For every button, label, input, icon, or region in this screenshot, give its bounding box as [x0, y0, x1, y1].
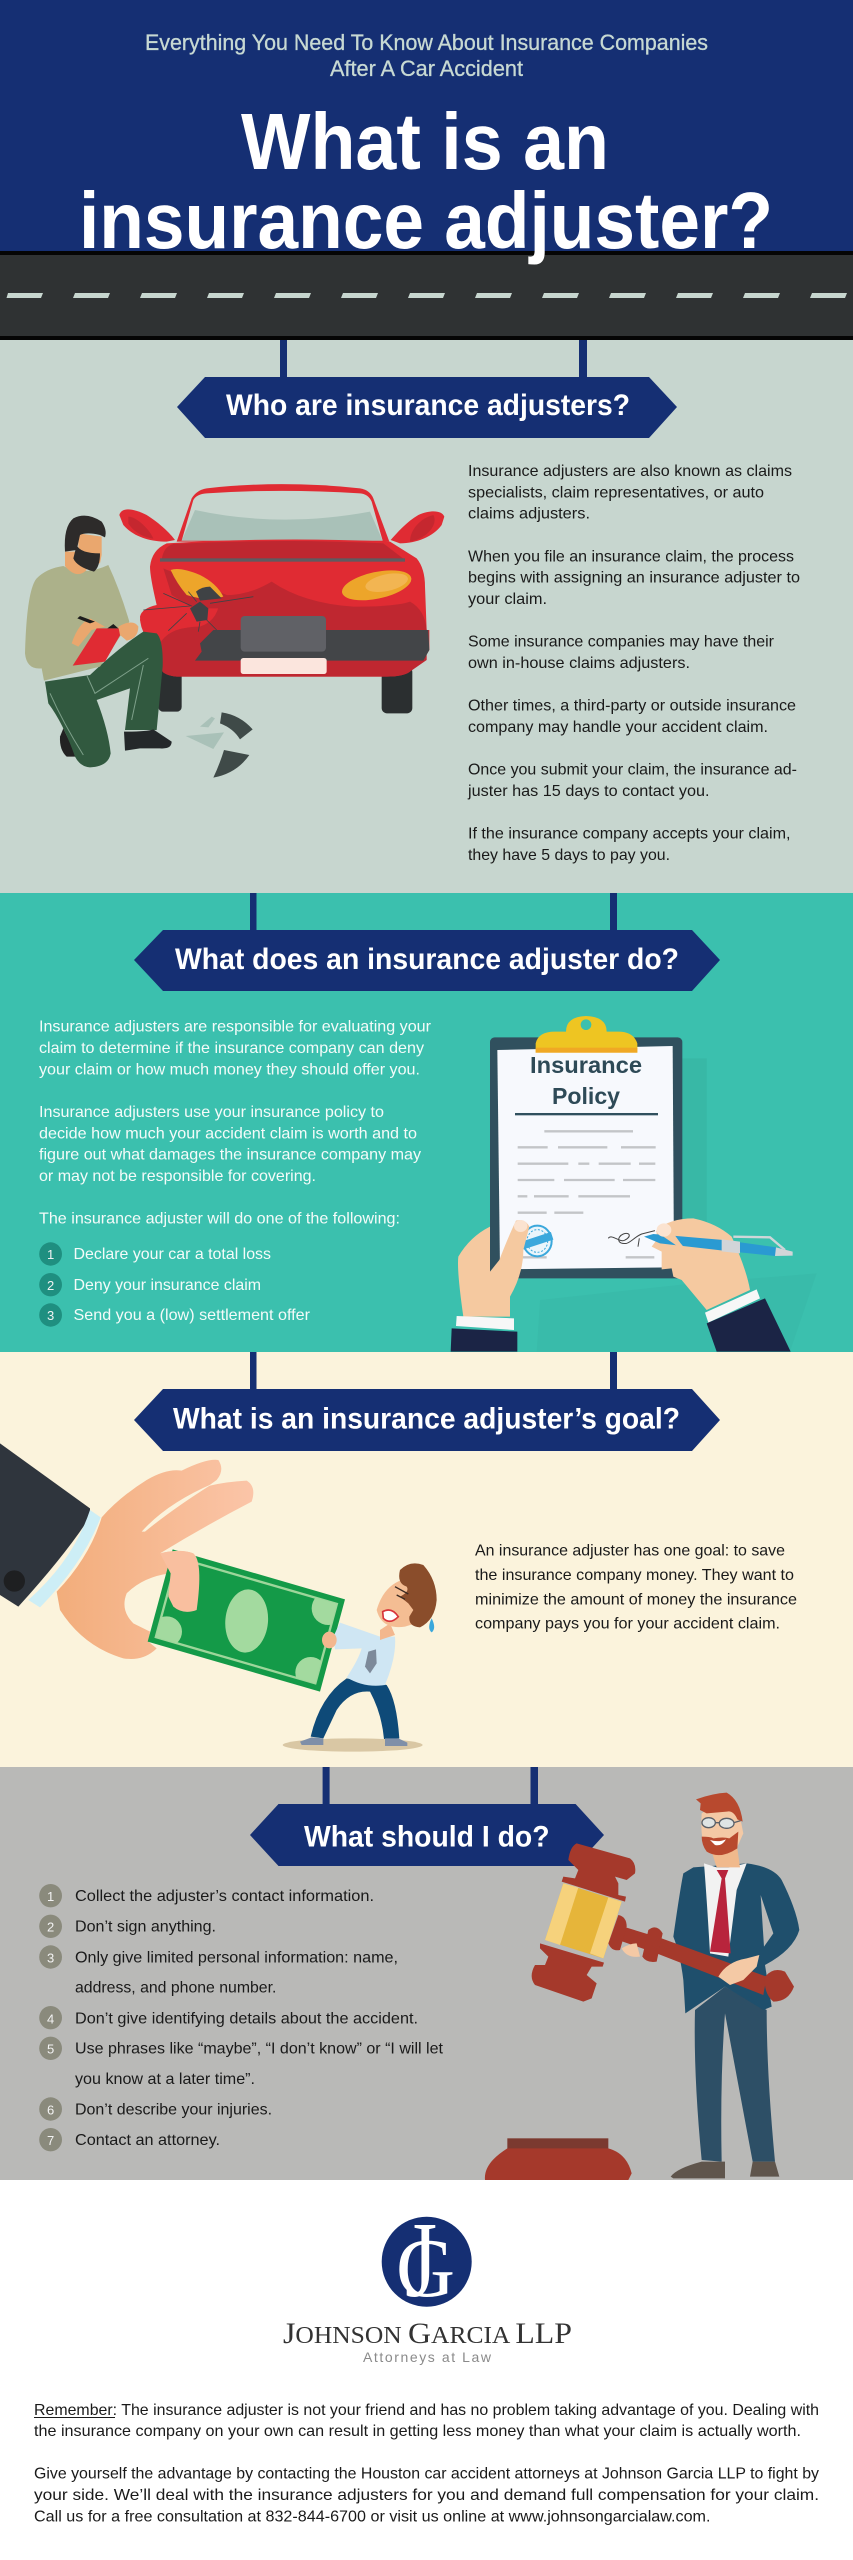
list: seven steps: 4	[47, 2011, 54, 2026]
list: seven steps: Collect the adjuster’s contact information.	[75, 1888, 374, 1905]
text: who are adjusters: When you file an insurance claim, the process	[468, 548, 794, 565]
text: who are adjusters	[467, 463, 800, 864]
banner: what should I do	[250, 1767, 604, 1866]
text: who are adjusters: Other times, a third-party or outside insurance	[468, 698, 796, 715]
subtitle: Everything You Need To Know About Insurance Companies	[145, 30, 708, 55]
title: What is an	[241, 97, 609, 186]
list: seven steps: Don’t describe your injuries.	[75, 2102, 272, 2119]
illustration: insurance policy clipboard: Insurance	[530, 1052, 642, 1078]
logo: Johnson Garcia LLP: Attorneys at Law	[363, 2349, 492, 2365]
illustration: damaged red car	[119, 484, 444, 778]
text: who are adjusters: they have 5 days to pay you.	[468, 847, 670, 864]
panel: header background	[0, 0, 853, 252]
illustration: lawyer holding gavel	[485, 1793, 799, 2180]
text: closing remarks: Remember: The insurance adjuster is not your friend and has no problem taking advantage of you. Dealing with	[34, 2402, 819, 2419]
text: closing remarks	[34, 2402, 819, 2525]
text: who are adjusters: Once you submit your claim, the insurance ad-	[468, 762, 797, 779]
list: seven steps: address, and phone number.	[75, 1980, 276, 1997]
list: three outcomes: Declare your car a total loss	[74, 1246, 271, 1263]
logo: Johnson Garcia LLP: JOHNSON GARCIA LLP	[283, 2317, 572, 2350]
text: who are adjusters: claims adjusters.	[468, 506, 590, 523]
list: seven steps: 1	[47, 1889, 54, 1904]
illustration: insurance policy clipboard	[451, 1016, 817, 1352]
text: adjuster responsibilities: Insurance adjusters are responsible for evaluating your	[39, 1019, 432, 1036]
list: seven steps: 2	[47, 1920, 54, 1935]
subtitle: After A Car Accident	[330, 56, 523, 81]
text: who are adjusters: begins with assigning an insurance adjuster to	[468, 570, 800, 587]
logo: Johnson Garcia LLP	[283, 2201, 572, 2365]
text: adjuster responsibilities: figure out what damages the insurance company may	[39, 1147, 421, 1164]
banner: adjuster goal: What is an insurance adjuster’s goal?	[173, 1403, 680, 1436]
text: who are adjusters: company may handle your accident claim.	[468, 719, 768, 736]
text: adjuster responsibilities: The insurance adjuster will do one of the following:	[39, 1211, 400, 1228]
text: closing remarks: your side. We’ll deal with the insurance adjusters for you and demand full compensation for your claim.	[34, 2487, 819, 2504]
list: seven steps: Don’t sign anything.	[75, 1919, 216, 1936]
text: closing remarks: the insurance company on your own can result in getting less money than what your claim is actually worth.	[34, 2423, 801, 2440]
text: who are adjusters: Some insurance companies may have their	[468, 634, 775, 651]
list: three outcomes: 2	[47, 1278, 54, 1293]
list: seven steps: you know at a later time”.	[75, 2071, 255, 2088]
list: seven steps: 7	[47, 2133, 54, 2148]
text: closing remarks: Give yourself the advantage by contacting the Houston car accident attorneys at Johnson Garcia LLP to fight by	[34, 2466, 819, 2483]
text: adjuster responsibilities: claim to determine if the insurance company can deny	[39, 1040, 424, 1057]
panel: footer background	[0, 2180, 853, 2560]
list: seven steps: 6	[47, 2103, 54, 2118]
panel: who are insurance adjusters	[0, 340, 853, 893]
list: seven steps	[39, 1884, 444, 2151]
text: adjuster responsibilities: Insurance adjusters use your insurance policy to	[39, 1104, 384, 1121]
subtitle	[145, 30, 708, 81]
illustration: kneeling adjuster	[25, 516, 172, 767]
text: adjuster responsibilities: or may not be responsible for covering.	[39, 1168, 316, 1185]
list: seven steps: Don’t give identifying details about the accident.	[75, 2010, 418, 2027]
road	[0, 251, 853, 340]
list: seven steps: 3	[47, 1950, 54, 1965]
illustration: insurance policy clipboard: Policy	[552, 1083, 620, 1109]
text: closing remarks: Call us for a free consultation at 832-844-6700 or visit us online at www.johnsongarcialaw.com.	[34, 2508, 711, 2525]
list: seven steps: Use phrases like “maybe”, “I don’t know” or “I will let	[75, 2041, 444, 2058]
list: three outcomes: Send you a (low) settlement offer	[74, 1307, 311, 1324]
text: who are adjusters: own in-house claims adjusters.	[468, 655, 690, 672]
title: insurance adjuster?	[79, 176, 773, 265]
illustration: hand pulling money from man	[0, 1443, 437, 1752]
list: seven steps: 5	[47, 2042, 54, 2057]
text: who are adjusters: Insurance adjusters are also known as claims	[468, 463, 792, 480]
text: adjuster responsibilities	[39, 1019, 432, 1228]
text: who are adjusters: If the insurance company accepts your claim,	[468, 826, 790, 843]
banner: what does an adjuster do	[134, 893, 720, 991]
panel: adjuster goal	[0, 1352, 853, 1767]
text: adjuster goal: An insurance adjuster has one goal: to save	[475, 1543, 785, 1560]
banner: who are insurance adjusters	[177, 340, 677, 438]
banner: what does an adjuster do: What does an insurance adjuster do?	[175, 943, 679, 976]
text: adjuster responsibilities: your claim or how much money they should offer you.	[39, 1061, 420, 1078]
logo: Johnson Garcia LLP: G	[396, 2222, 455, 2315]
list: seven steps: Contact an attorney.	[75, 2132, 220, 2149]
title	[79, 97, 773, 265]
logo: Johnson Garcia LLP: J	[405, 2201, 437, 2320]
list: seven steps: Only give limited personal information: name,	[75, 1949, 398, 1966]
text: adjuster goal	[475, 1543, 797, 1633]
list: three outcomes: 3	[47, 1308, 54, 1323]
banner: who are insurance adjusters: Who are insurance adjusters?	[226, 389, 630, 422]
banner: what should I do: What should I do?	[304, 1821, 550, 1854]
text: who are adjusters: specialists, claim representatives, or auto	[468, 484, 764, 501]
list: three outcomes: Deny your insurance claim	[74, 1277, 261, 1294]
text: adjuster goal: the insurance company money. They want to	[475, 1567, 794, 1584]
banner: adjuster goal	[134, 1352, 720, 1451]
text: who are adjusters: your claim.	[468, 591, 547, 608]
text: adjuster responsibilities: decide how much your accident claim is worth and to	[39, 1125, 417, 1142]
panel: what should I do	[0, 1767, 853, 2180]
text: who are adjusters: juster has 15 days to contact you.	[467, 783, 710, 800]
text: adjuster goal: company pays you for your accident claim.	[475, 1616, 780, 1633]
text: adjuster goal: minimize the amount of money the insurance	[475, 1591, 797, 1608]
panel: what does an adjuster do	[0, 893, 853, 1352]
list: three outcomes: 1	[47, 1247, 54, 1262]
list: three outcomes	[39, 1242, 311, 1327]
